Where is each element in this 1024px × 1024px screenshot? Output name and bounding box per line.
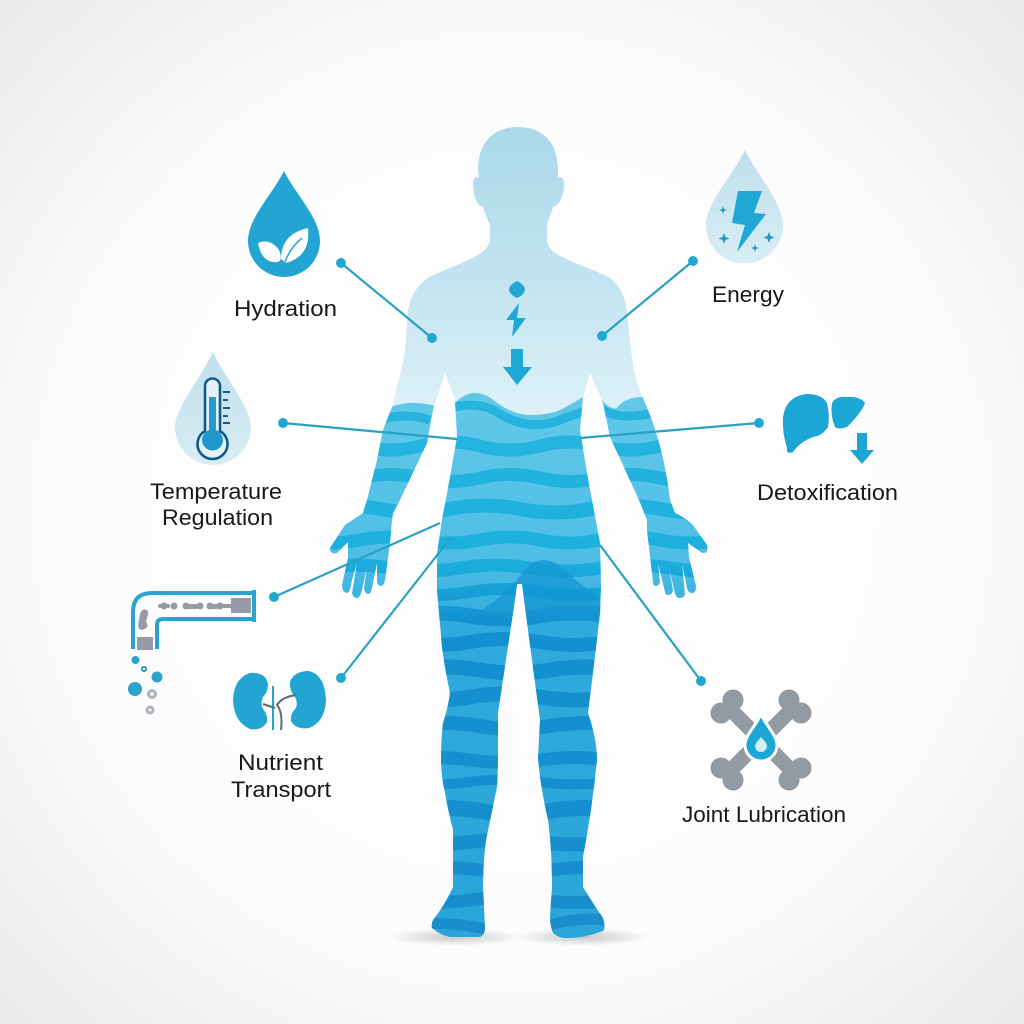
label: Detoxification	[757, 480, 898, 505]
water stripes	[330, 392, 708, 938]
icon: pale drop with bolt	[706, 150, 783, 264]
label: Joint Lubrication	[682, 802, 846, 827]
icon: pipe outline	[133, 590, 254, 649]
label	[150, 479, 282, 530]
label	[231, 750, 331, 802]
icon: down arrow	[503, 349, 532, 385]
label: Transport	[231, 777, 331, 802]
connector end dots	[269, 256, 764, 686]
label: Nutrient	[238, 750, 323, 775]
pipe gray parts	[137, 598, 251, 650]
item: Detoxification	[757, 394, 898, 505]
icon: chest bolt	[506, 303, 526, 337]
item: Nutrient Transport	[231, 671, 331, 802]
icon: crossed bones with drop	[710, 690, 812, 790]
icon: liver with arrow	[783, 394, 874, 464]
item: Energy	[706, 150, 784, 307]
ground shadow	[387, 928, 650, 946]
label: Energy	[712, 282, 784, 307]
icon: kidneys	[233, 671, 326, 730]
label: Hydration	[234, 296, 337, 321]
chest icons	[503, 281, 532, 385]
item: pipe	[128, 590, 254, 714]
item: Temperature Regulation	[150, 352, 282, 530]
falling droplets	[128, 656, 162, 714]
label: Regulation	[162, 505, 273, 530]
icon: chest drop	[509, 281, 525, 298]
upper body light fill	[390, 127, 644, 415]
label: Temperature	[150, 479, 282, 504]
icon: thermometer in drop	[175, 352, 251, 465]
hip wave	[478, 560, 603, 612]
item: Hydration	[234, 171, 337, 321]
item: Joint Lubrication	[682, 690, 846, 827]
connector lines	[274, 261, 759, 681]
icon: water drop with leaves	[248, 171, 320, 277]
human body silhouette filled with water	[330, 127, 708, 938]
